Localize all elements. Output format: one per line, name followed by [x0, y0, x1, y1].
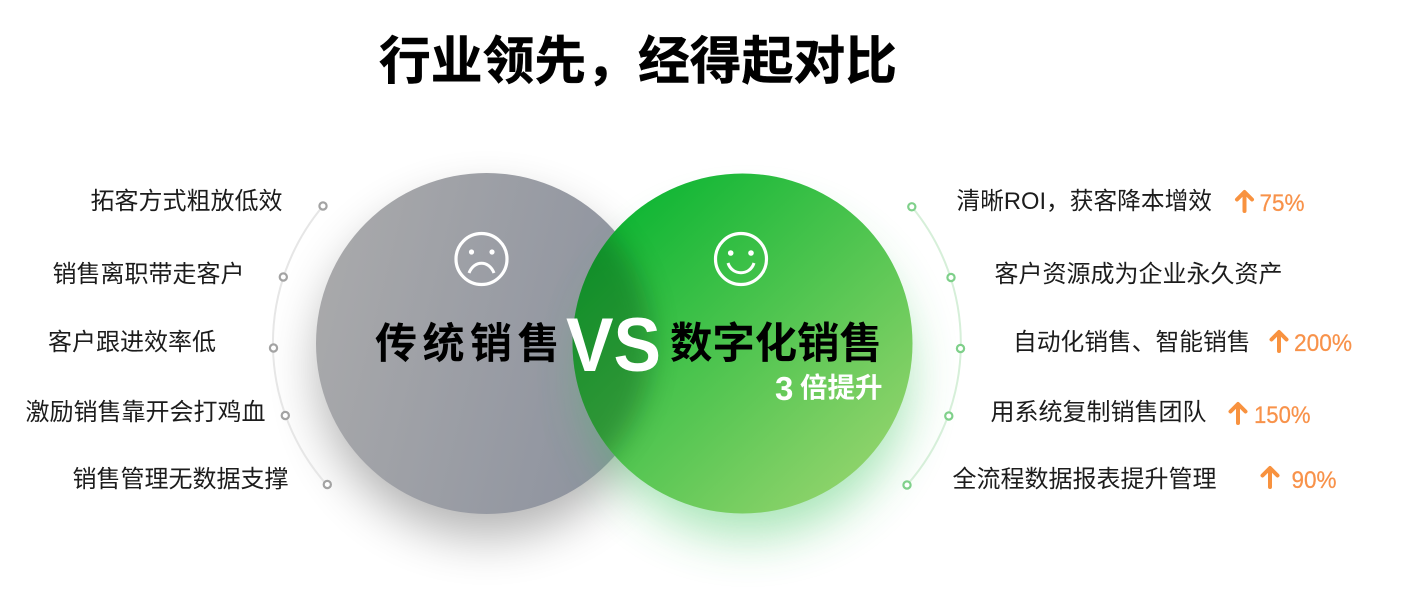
right list: benefits [952, 188, 1282, 493]
heading: traditional sales: 传统销售 [375, 320, 565, 367]
overlap shadow [572, 227, 664, 460]
callout: 3x improvement: 3 [775, 370, 793, 407]
green glow [588, 216, 908, 536]
right list: benefits: 客户资源成为企业永久资产 [994, 261, 1282, 288]
metric: 150% [1230, 402, 1310, 429]
metric: 200% [1272, 330, 1352, 357]
right list: benefits: 用系统复制销售团队 [990, 399, 1206, 426]
callout: 3x improvement: 倍提升 [800, 372, 882, 403]
right arc with dots [903, 203, 964, 489]
metric: 75%: 75% [1260, 190, 1304, 217]
left list: drawbacks [26, 188, 288, 493]
left list: drawbacks: 销售离职带走客户 [52, 261, 244, 288]
right list: benefits: 全流程数据报表提升管理 [952, 466, 1216, 493]
title: 行业领先，经得起对比 [379, 32, 897, 90]
callout: 3x improvement [775, 370, 882, 407]
left list: drawbacks: 客户跟进效率低 [48, 329, 216, 356]
metric: 90%: 90% [1292, 467, 1336, 494]
panel: digital sales [569, 174, 938, 566]
panel: traditional sales [316, 173, 657, 536]
metric: 200%: 200% [1294, 330, 1352, 357]
gray circle [316, 173, 657, 514]
icon: sad face [456, 234, 507, 284]
metric: 150%: 150% [1254, 402, 1310, 429]
left list: drawbacks: 拓客方式粗放低效 [90, 188, 282, 215]
left list: drawbacks: 激励销售靠开会打鸡血 [26, 399, 266, 426]
right list: benefits: 清晰ROI，获客降本增效 [956, 188, 1212, 215]
gray circle shadow [319, 200, 655, 536]
green circle [572, 174, 912, 514]
right list: benefits: 自动化销售、智能销售 [1013, 329, 1250, 356]
metric: 75% [1237, 190, 1304, 217]
metric: 90% [1262, 467, 1336, 494]
VS label: VS [566, 303, 661, 388]
left arc with dots [270, 202, 331, 488]
heading: digital sales: 数字化销售 [670, 320, 882, 367]
left list: drawbacks: 销售管理无数据支撑 [72, 466, 288, 493]
icon: smiling face [716, 234, 766, 284]
